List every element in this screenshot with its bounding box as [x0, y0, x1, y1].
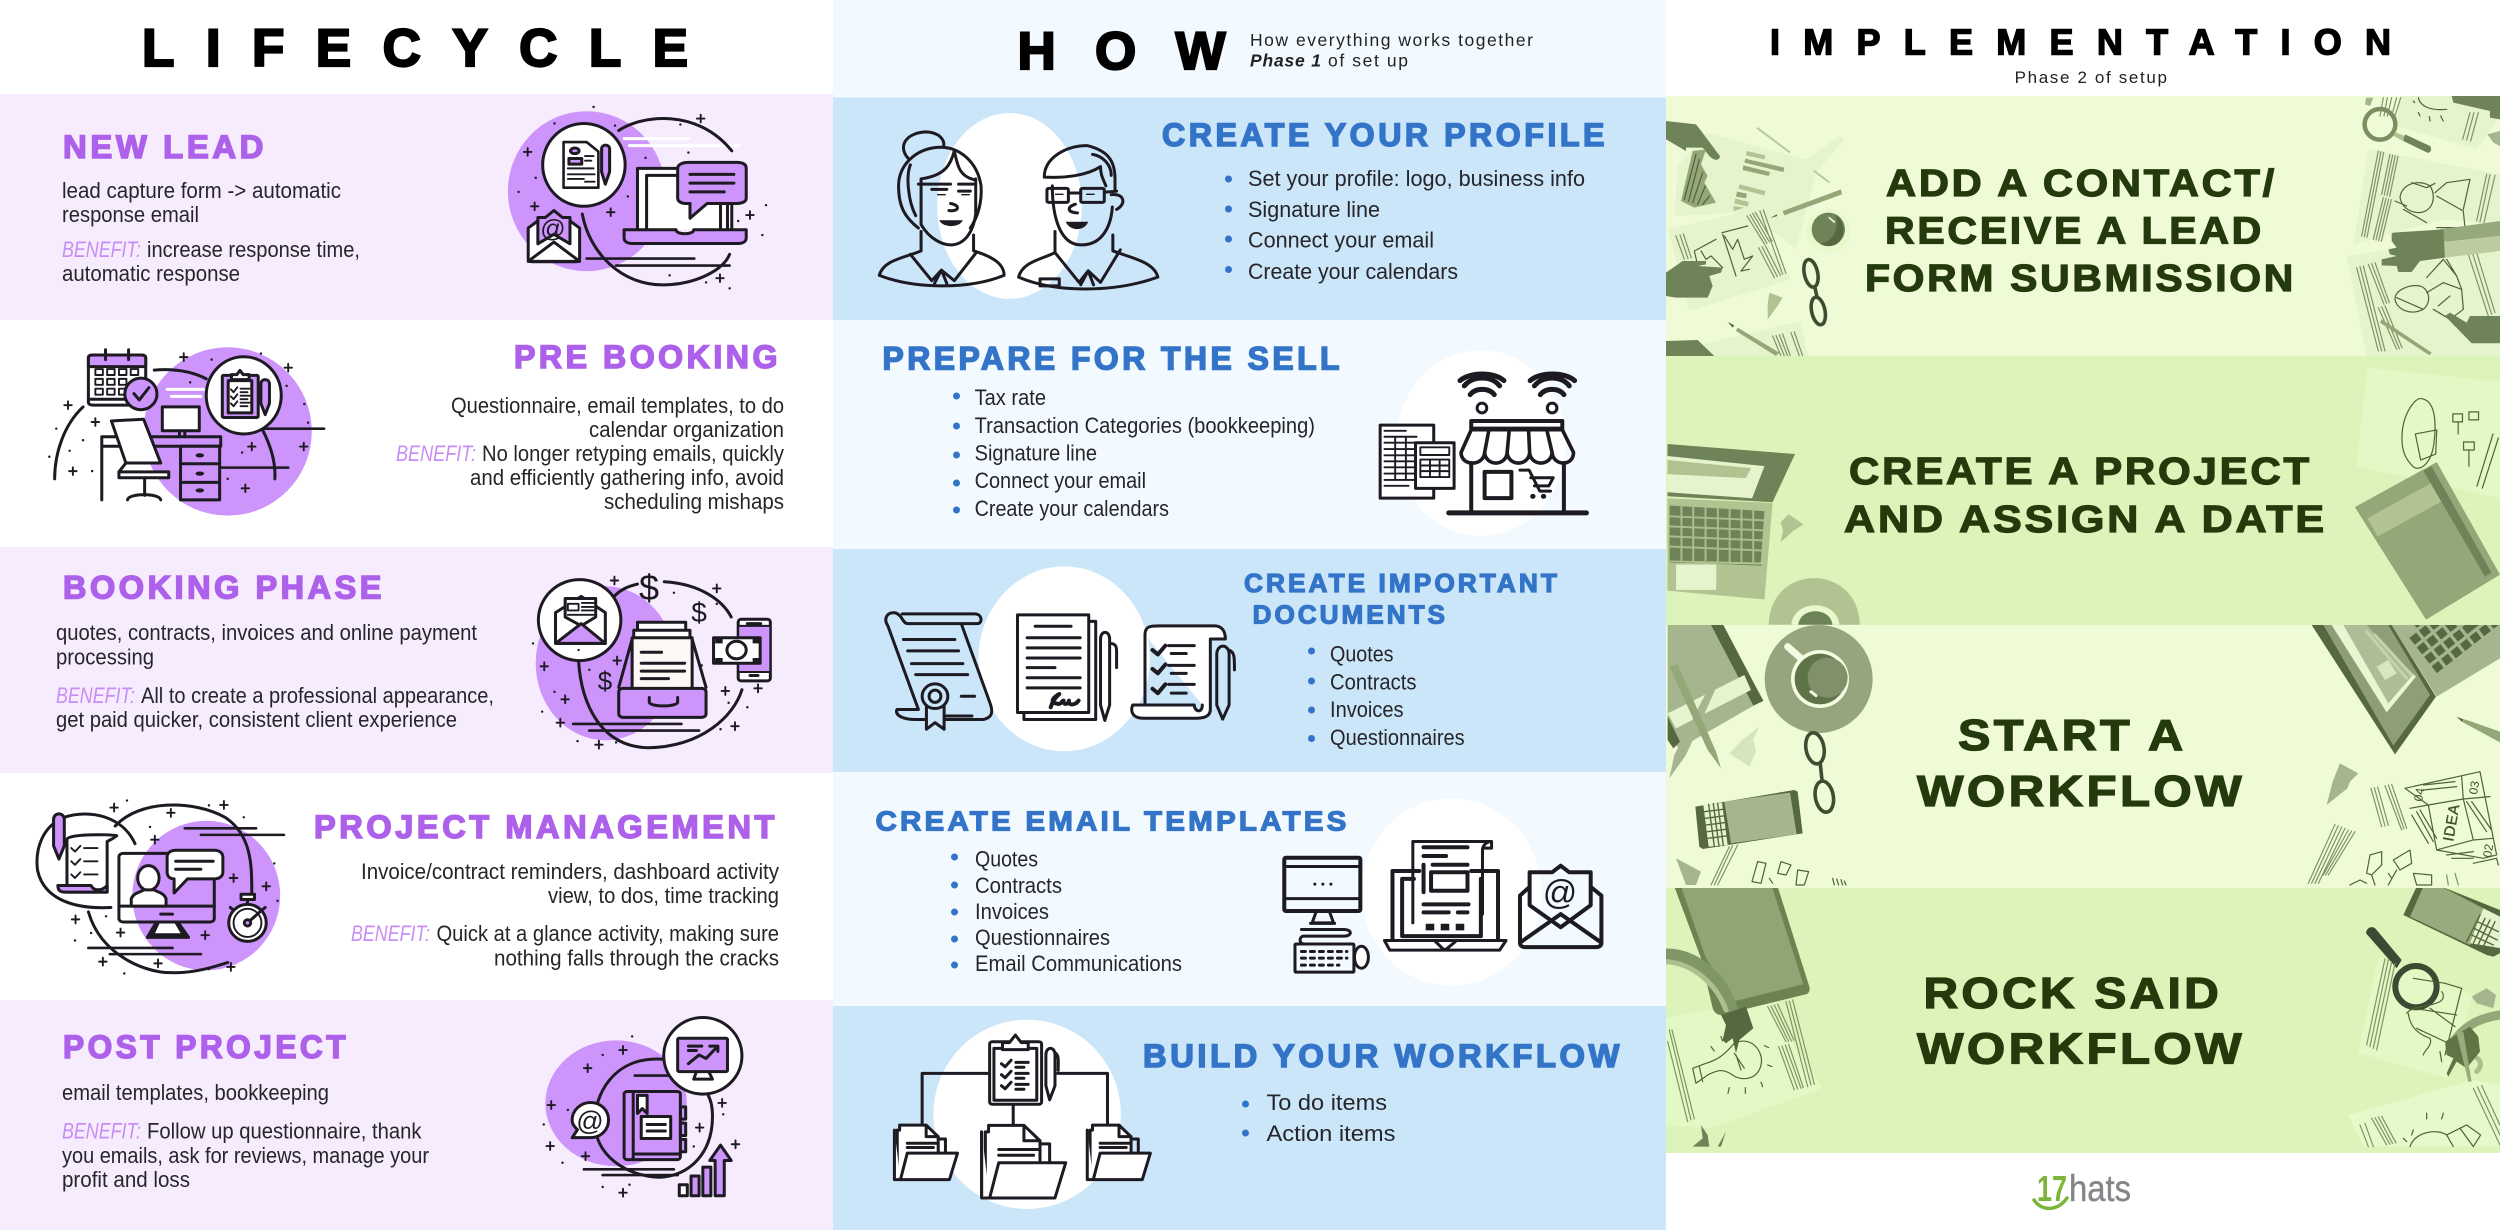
list: important documents: Questionnaires — [1330, 725, 1465, 750]
icon: inbox tray with money: $ — [691, 597, 707, 628]
text: pre booking description: scheduling mishaps — [604, 489, 784, 514]
list: email templates — [951, 847, 1182, 976]
icon: monitor with checklist and stopwatch — [37, 801, 284, 973]
panel: booking phase — [0, 547, 833, 773]
icon: notebook with chart and growth arrow — [544, 1018, 742, 1197]
heading: create important documents: DOCUMENTS — [1253, 600, 1448, 630]
illustration: coffee, phone and open laptop: IDEA — [2440, 803, 2463, 843]
heading: create important documents — [1244, 568, 1560, 630]
text: how subtitle — [1250, 30, 1533, 70]
text: booking phase description: BENEFIT: — [56, 683, 135, 708]
text: project management description: Quick at a glance activity, making sure — [436, 921, 779, 946]
list: important documents — [1308, 642, 1465, 750]
column: how — [833, 0, 1666, 1230]
logo: 17hats — [2034, 1168, 2131, 1209]
text: new lead description: increase response time, — [147, 237, 360, 262]
heading: add a contact — [1865, 163, 2296, 300]
text: post project description: Follow up questionnaire, thank — [147, 1119, 422, 1144]
list: sales preparation steps: Signature line — [975, 440, 1097, 466]
heading: add a contact: ADD A CONTACT/ — [1886, 163, 2277, 205]
heading: create a project — [1844, 451, 2327, 541]
list: important documents: Quotes — [1330, 642, 1394, 666]
panel: start a workflow — [1666, 625, 2500, 888]
list: workflow items: Action items — [1266, 1121, 1396, 1146]
list: profile setup steps: Signature line — [1248, 197, 1380, 222]
panel: build your workflow — [833, 1006, 1666, 1230]
text: pre booking description: and efficiently gathering info, avoid — [470, 465, 784, 490]
heading: create your profile: CREATE YOUR PROFILE — [1162, 117, 1608, 153]
heading: start a workflow: WORKFLOW — [1917, 767, 2245, 816]
heading: prepare for the sell: PREPARE FOR THE SELL — [882, 340, 1343, 376]
column: lifecycle — [0, 0, 833, 1230]
heading: add a contact: RECEIVE A LEAD — [1885, 210, 2264, 252]
illustration: coffee, phone and open laptop: 04 — [2411, 787, 2427, 803]
list: email templates: Email Communications — [975, 951, 1182, 976]
text: booking phase description: get paid quicker, consistent client experience — [56, 707, 457, 732]
text: post project description — [62, 1080, 429, 1192]
illustration: coffee, phone and open laptop: 03 — [2466, 780, 2482, 796]
list: sales preparation steps: Transaction Categories (bookkeeping) — [975, 413, 1315, 438]
text: new lead description: automatic response — [62, 261, 240, 286]
panel: create important documents — [833, 549, 1666, 772]
icon: desk with calendar and clipboard — [49, 347, 324, 516]
illustration: tablet, magnifier and light bulbs — [1666, 887, 2500, 1147]
panel: pre booking — [0, 320, 833, 547]
list: sales preparation steps: Tax rate — [975, 385, 1046, 410]
heading: rock said workflow: WORKFLOW — [1917, 1025, 2245, 1074]
illustration: laptop, notebook and coffee — [1667, 368, 2500, 625]
text: project management description: view, to dos, time tracking — [548, 883, 779, 908]
list: profile setup steps: Set your profile: logo, business info — [1248, 166, 1585, 191]
list: important documents: Contracts — [1330, 670, 1416, 695]
icon: notebook with chart and growth arrow: @ — [576, 1106, 604, 1136]
text: post project description: profit and loss — [62, 1167, 190, 1192]
icon: lead capture with laptop and envelope — [508, 107, 766, 288]
heading: start a workflow — [1917, 711, 2245, 816]
heading: rock said workflow — [1917, 969, 2245, 1074]
heading: create email templates: CREATE EMAIL TEMPLATES — [876, 806, 1350, 836]
text: post project description: email templates, bookkeeping — [62, 1080, 329, 1105]
text: project management description: BENEFIT: — [351, 921, 430, 946]
text: new lead description: BENEFIT: — [62, 237, 141, 262]
panel: add a contact — [1666, 96, 2500, 356]
icon: two people portraits — [879, 113, 1158, 299]
text: new lead description: response email — [62, 202, 199, 227]
icon: inbox tray with money: $ — [639, 567, 659, 608]
illustration: coffee, phone and open laptop: 02 — [2480, 843, 2496, 859]
icon: inbox tray with money: $ — [598, 666, 613, 696]
icon: inbox tray with money — [533, 567, 770, 749]
heading: build your workflow: BUILD YOUR WORKFLOW — [1143, 1038, 1623, 1074]
icon: clipboard connected to folders — [894, 1020, 1150, 1209]
panel: rock said workflow — [1666, 887, 2500, 1153]
panel: create a project — [1666, 356, 2500, 625]
list: email templates: Invoices — [975, 899, 1049, 924]
title: implementation: IMPLEMENTATION — [1770, 22, 2391, 63]
title: lifecycle: LIFECYCLE — [142, 19, 688, 78]
text: how subtitle: of set up — [1328, 50, 1408, 70]
text: new lead description: lead capture form -> automatic — [62, 178, 341, 203]
icon: storefront with wifi and invoices — [1380, 350, 1586, 536]
panel: project management — [0, 773, 833, 1000]
text: booking phase description: processing — [56, 644, 154, 670]
heading: project management: PROJECT MANAGEMENT — [314, 809, 778, 845]
text: pre booking description: Questionnaire, email templates, to do — [451, 393, 784, 418]
list: sales preparation steps: Create your calendars — [975, 496, 1169, 521]
panel: create email templates — [833, 772, 1666, 1006]
logo: 17hats: hats — [2069, 1168, 2131, 1209]
panel: prepare for the sell — [833, 320, 1666, 549]
text: booking phase description: All to create a professional appearance, — [141, 683, 494, 708]
text: phase 2 subtitle: Phase 2 of setup — [2015, 68, 2167, 87]
text: pre booking description: calendar organization — [589, 417, 784, 442]
list: sales preparation steps: Connect your email — [975, 468, 1146, 493]
text: new lead description — [62, 178, 360, 286]
text: booking phase description: quotes, contracts, invoices and online payment — [56, 620, 477, 645]
list: email templates: Contracts — [975, 873, 1062, 898]
text: project management description — [351, 859, 779, 971]
list: email templates: Questionnaires — [975, 925, 1110, 950]
heading: create important documents: CREATE IMPORTANT — [1244, 568, 1560, 598]
heading: pre booking: PRE BOOKING — [514, 339, 781, 375]
text: pre booking description: BENEFIT: — [396, 441, 476, 466]
heading: new lead: NEW LEAD — [63, 129, 267, 165]
icon: lead capture with laptop and envelope: @ — [540, 215, 566, 243]
text: post project description: you emails, ask for reviews, manage your — [62, 1143, 429, 1168]
heading: post project: POST PROJECT — [63, 1029, 349, 1065]
illustration: coffee, phone and open laptop — [1668, 579, 2500, 885]
list: workflow items: To do items — [1266, 1090, 1387, 1115]
panel: post project — [0, 1000, 833, 1230]
list: workflow items — [1242, 1090, 1396, 1146]
text: post project description: BENEFIT: — [62, 1119, 141, 1144]
heading: rock said workflow: ROCK SAID — [1924, 969, 2222, 1018]
heading: booking phase: BOOKING PHASE — [63, 570, 385, 606]
text: booking phase description — [56, 620, 494, 732]
list: important documents: Invoices — [1330, 697, 1404, 722]
panel: new lead — [0, 94, 833, 320]
illustration: desk papers, hands and coffee — [1666, 96, 2500, 356]
text: pre booking description: No longer retyping emails, quickly — [482, 441, 784, 466]
heading: create a project: AND ASSIGN A DATE — [1844, 499, 2327, 541]
list: sales preparation steps — [953, 385, 1315, 521]
heading: start a workflow: START A — [1958, 711, 2186, 760]
logo: 17hats: 17 — [2037, 1168, 2067, 1209]
list: profile setup steps: Create your calendars — [1248, 259, 1458, 284]
panel: create your profile — [833, 98, 1666, 320]
text: project management description: nothing falls through the cracks — [494, 946, 779, 971]
heading: create a project: CREATE A PROJECT — [1849, 451, 2312, 493]
title: how: HOW — [1018, 22, 1226, 81]
text: how subtitle: How everything works together — [1250, 30, 1533, 50]
heading: add a contact: FORM SUBMISSION — [1865, 258, 2296, 300]
list: profile setup steps — [1225, 166, 1585, 284]
column: implementation — [1666, 22, 2500, 1209]
icon: computer, laptop document, email — [1284, 798, 1601, 986]
text: pre booking description — [396, 393, 784, 514]
icon: computer, laptop document, email: @ — [1543, 874, 1577, 912]
text: how subtitle: Phase 1 — [1250, 50, 1321, 70]
list: profile setup steps: Connect your email — [1248, 228, 1434, 253]
list: email templates: Quotes — [975, 847, 1038, 872]
text: project management description: Invoice/contract reminders, dashboard activity — [361, 859, 779, 884]
icon: certificate, signed contract, checklist — [886, 566, 1234, 751]
